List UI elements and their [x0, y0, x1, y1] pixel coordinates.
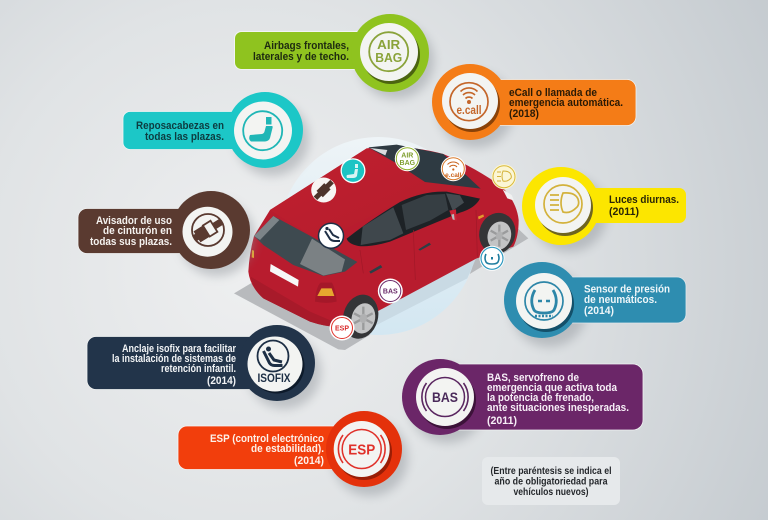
icon: BAS — [422, 378, 468, 416]
text: headrests — [136, 120, 224, 143]
panel: tyre pressure — [504, 262, 686, 347]
panel: seat belt — [78, 191, 255, 276]
door lines — [360, 210, 477, 280]
text: isofix — [112, 343, 237, 387]
small badge: airbag — [395, 146, 420, 171]
small badge: airbag: AIR — [401, 152, 413, 160]
icon: airbag: AIR — [377, 37, 401, 52]
small badge: eCall — [441, 156, 466, 181]
text: ESP: (2014) — [294, 455, 324, 467]
text: BAS: ante situaciones inesperadas. — [487, 402, 629, 414]
small badge: eCall: e.call — [445, 172, 462, 179]
icon: eCall: e.call — [456, 105, 482, 117]
ground shadow — [234, 227, 528, 350]
icon: child seat: ISOFIX — [258, 373, 291, 385]
small badge: BAS — [378, 278, 403, 304]
note: year explanation: (Entre paréntesis se indica el — [490, 465, 612, 477]
text: isofix: (2014) — [207, 375, 236, 387]
text: eCall: emergencia automática. — [509, 97, 623, 109]
illustration: red car — [234, 137, 528, 350]
panel: headrests — [123, 92, 309, 176]
text: BAS: BAS, servofreno de — [487, 372, 579, 384]
text: seat belt: de cinturón en — [103, 225, 172, 237]
text: tyre pressure: Sensor de presión — [584, 284, 670, 296]
icon: child seat — [258, 340, 291, 385]
text: ESP — [210, 433, 324, 467]
left edge tail light — [252, 250, 254, 258]
mirror — [449, 209, 457, 221]
text: ESP: ESP (control electrónico — [210, 433, 324, 445]
small badge: isofix — [318, 223, 344, 248]
licence plate — [270, 264, 299, 287]
icon: tyre pressure — [525, 282, 563, 320]
text: tyre pressure: (2014) — [584, 305, 614, 317]
text: headrests: todas las plazas. — [145, 131, 224, 143]
text: seat belt: Avisador de uso — [96, 215, 172, 227]
text: BAS: (2011) — [487, 415, 517, 427]
door handles — [369, 243, 431, 274]
panel: isofix — [87, 325, 321, 409]
text: BAS: emergencia que activa toda — [487, 382, 618, 394]
headlight — [503, 189, 514, 201]
text: isofix: Anclaje isofix para facilitar — [122, 343, 237, 355]
small badge: seat — [340, 158, 366, 183]
text: daytime lights — [609, 194, 679, 218]
side windows — [347, 192, 480, 246]
text: airbags: Airbags frontales, — [264, 40, 349, 52]
note: year explanation: año de obligatoriedad para — [494, 476, 608, 488]
indicator — [478, 214, 484, 219]
text: tyre pressure — [584, 284, 670, 317]
lower bumper — [251, 277, 345, 327]
small badge: tyre pressure — [480, 246, 504, 271]
text: seat belt — [90, 215, 172, 248]
icon: BAS: BAS — [432, 389, 458, 405]
text: airbags — [253, 40, 349, 63]
panel: daytime lights — [522, 167, 686, 252]
icon: eCall — [450, 83, 488, 121]
text: isofix: la instalación de sistemas de — [112, 353, 236, 365]
text: BAS — [487, 372, 629, 427]
panel: ESP — [178, 411, 408, 496]
text: seat belt: todas sus plazas. — [90, 236, 172, 248]
text: isofix: retención infantil. — [161, 363, 236, 375]
icon: airbag: BAG — [375, 50, 402, 65]
tail light — [315, 283, 337, 303]
small badge: seat belt — [311, 178, 336, 202]
text: airbags: laterales y de techo. — [253, 51, 349, 63]
small badge: ESP: ESP — [335, 326, 349, 332]
windshield — [368, 145, 481, 189]
car roof — [270, 148, 480, 237]
rear wheel — [338, 291, 383, 343]
panel: eCall — [432, 64, 636, 148]
small badge: daytime lights — [492, 164, 516, 189]
front wheel — [475, 209, 520, 258]
panel: airbags — [234, 14, 434, 99]
text: eCall: eCall o llamada de — [509, 87, 597, 99]
note: year explanation — [482, 457, 620, 505]
small badge: BAS: BAS — [383, 288, 398, 296]
rear window — [254, 216, 357, 276]
text: ESP: de estabilidad). — [251, 443, 324, 455]
car body — [248, 147, 519, 327]
small badge: airbag: BAG — [400, 160, 416, 167]
icon: daytime lights — [544, 185, 582, 223]
text: daytime lights: (2011) — [609, 206, 639, 218]
text: eCall: (2018) — [509, 108, 539, 120]
car underside shadow — [377, 258, 476, 325]
text: BAS: la potencia de frenado, — [487, 392, 594, 404]
icon: ESP: ESP — [348, 442, 375, 458]
small badge: ESP — [330, 316, 354, 340]
text: eCall — [509, 87, 623, 120]
icon: seat — [243, 111, 282, 150]
note: year explanation: vehículos nuevos) — [514, 486, 588, 498]
panel: BAS — [402, 359, 643, 443]
text: tyre pressure: de neumáticos. — [584, 294, 657, 306]
icon: seat belt — [191, 214, 225, 246]
light blue disc — [279, 137, 477, 335]
icon: ESP — [338, 430, 385, 468]
icon: airbag — [369, 32, 408, 71]
text: daytime lights: Luces diurnas. — [609, 194, 679, 206]
text: headrests: Reposacabezas en — [136, 120, 224, 132]
